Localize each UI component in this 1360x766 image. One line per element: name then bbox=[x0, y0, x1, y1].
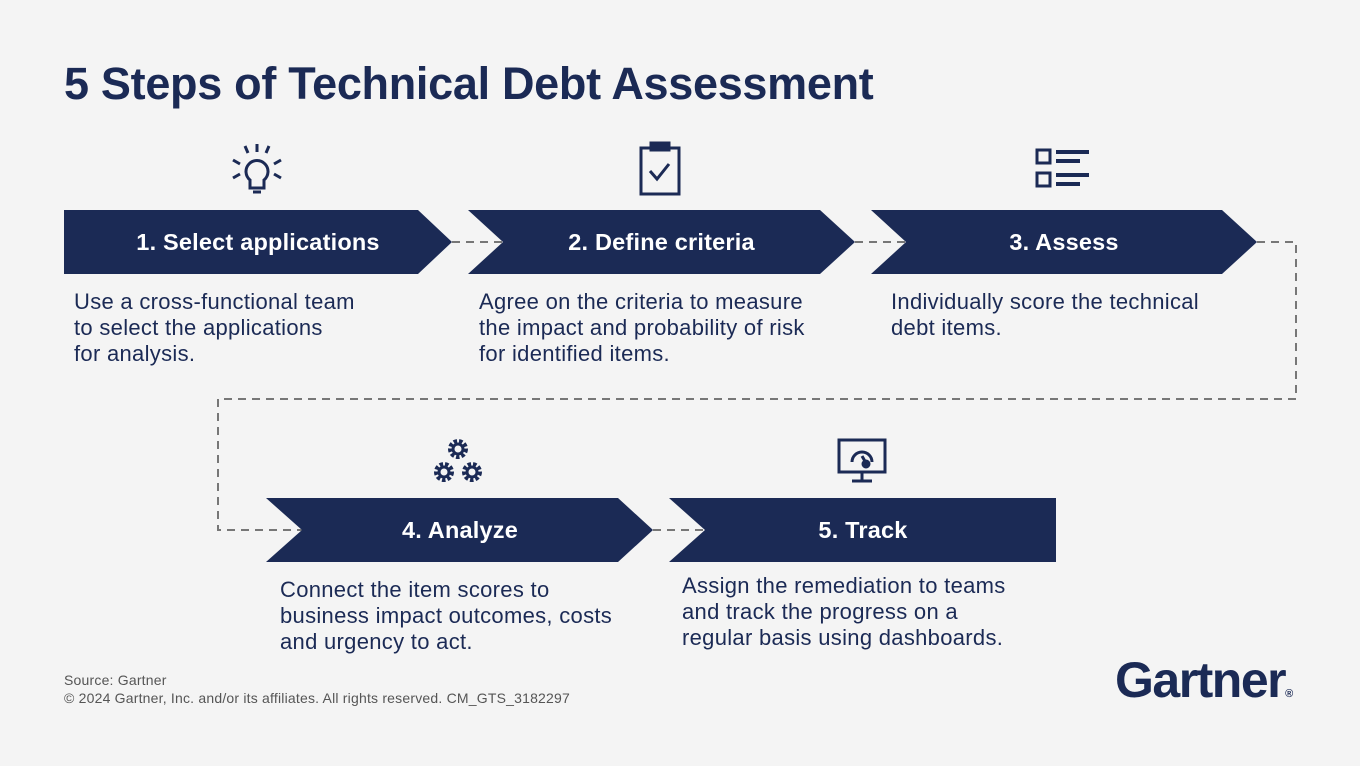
icon: lightbulb bbox=[233, 144, 281, 192]
arrow 4 bbox=[266, 498, 653, 562]
source footer: © 2024 Gartner, Inc. and/or its affiliates. All rights reserved. CM_GTS_3182297 bbox=[64, 690, 570, 706]
icon: monitor dashboard bbox=[839, 440, 885, 481]
text: step 3 bbox=[891, 289, 1199, 340]
text: step 1 bbox=[74, 289, 355, 366]
text: step 4 bbox=[280, 577, 612, 654]
connector lines bbox=[218, 242, 1296, 530]
arrow 5 bbox=[669, 498, 1056, 562]
text: step 3: Individually score the technical bbox=[891, 289, 1199, 314]
text: step 2: the impact and probability of risk bbox=[479, 315, 805, 340]
text: step 2: Agree on the criteria to measure bbox=[479, 289, 803, 314]
source footer: Source: Gartner bbox=[64, 672, 167, 688]
arrow 3 bbox=[871, 210, 1257, 274]
text: step 2: for identified items. bbox=[479, 341, 670, 366]
text: step 1: to select the applications bbox=[74, 315, 323, 340]
text: step 5: Assign the remediation to teams bbox=[682, 573, 1006, 598]
text: step 5: and track the progress on a bbox=[682, 599, 958, 624]
text: step 1: for analysis. bbox=[74, 341, 195, 366]
text: step 3: debt items. bbox=[891, 315, 1002, 340]
logo: Gartner® bbox=[1115, 652, 1292, 708]
icon: gears bbox=[436, 441, 480, 480]
arrow 1 bbox=[64, 210, 452, 274]
text: 3. Assess bbox=[1009, 229, 1119, 255]
icon: clipboard bbox=[641, 143, 679, 194]
text: step 5 bbox=[682, 573, 1006, 650]
text: 5. Track bbox=[818, 517, 908, 543]
text: 4. Analyze bbox=[402, 517, 518, 543]
text: step 1: Use a cross-functional team bbox=[74, 289, 355, 314]
icon: checklist bbox=[1037, 150, 1089, 186]
text: step 2 bbox=[479, 289, 805, 366]
step labels: 1. Select applications bbox=[136, 229, 380, 255]
text: step 4: Connect the item scores to bbox=[280, 577, 549, 602]
text: step 5: regular basis using dashboards. bbox=[682, 625, 1003, 650]
source footer bbox=[64, 672, 570, 706]
title: 5 Steps of Technical Debt Assessment bbox=[64, 58, 873, 109]
arrow 2 bbox=[468, 210, 855, 274]
text: step 4: and urgency to act. bbox=[280, 629, 473, 654]
text: 2. Define criteria bbox=[568, 229, 755, 255]
text: step 4: business impact outcomes, costs bbox=[280, 603, 612, 628]
